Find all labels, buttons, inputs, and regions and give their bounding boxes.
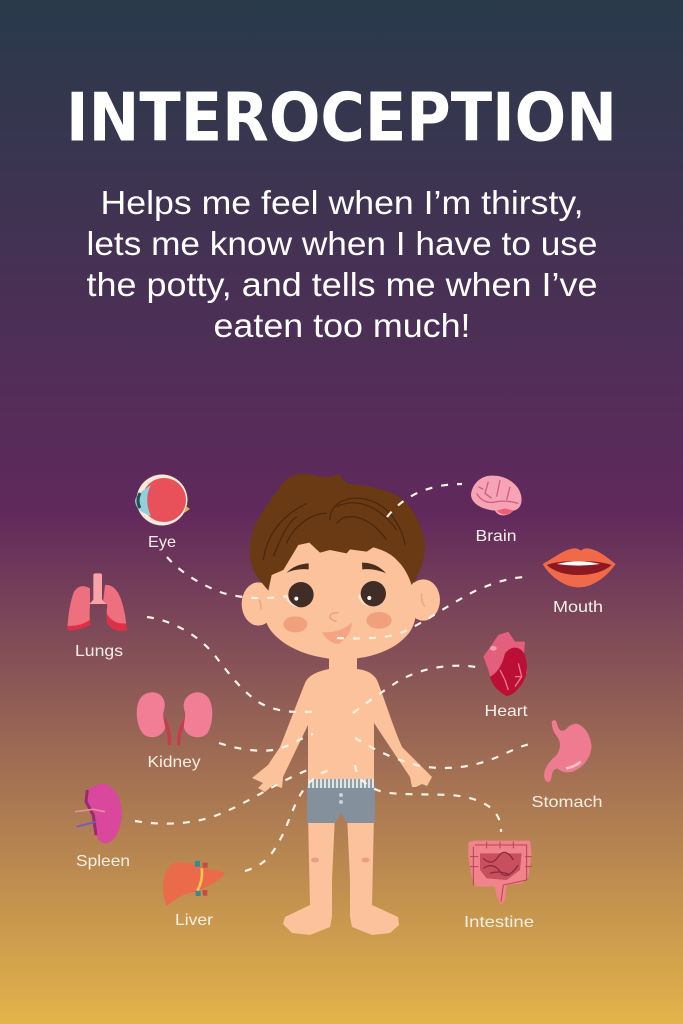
organ: liver [163, 861, 226, 929]
label: eye: Eye [148, 534, 176, 551]
organ: eye [135, 474, 190, 551]
label: intestine: Intestine [464, 914, 534, 931]
nose [330, 613, 338, 621]
organ: intestine [464, 841, 534, 931]
description text block: lets me know when I have to use [86, 225, 598, 262]
organ: stomach [532, 720, 602, 811]
label: kidney: Kidney [148, 754, 200, 771]
cheeks [283, 616, 307, 632]
organ: lungs [67, 573, 127, 660]
connector lines [135, 484, 536, 871]
organ: mouth [543, 548, 616, 616]
connector: spleen [135, 768, 313, 824]
connector: liver [245, 769, 332, 871]
label: spleen: Spleen [76, 853, 130, 870]
connector: lungs [147, 617, 320, 712]
description text block: Helps me feel when I’m thirsty, [100, 184, 584, 221]
eyebrows [287, 563, 309, 573]
head [242, 474, 440, 659]
connector: brain [387, 484, 462, 517]
label: brain: Brain [476, 528, 516, 545]
eyes [288, 582, 314, 607]
description text block [86, 184, 598, 344]
organ: spleen [75, 784, 130, 870]
label: liver: Liver [175, 912, 214, 929]
description text block: the potty, and tells me when I’ve [86, 266, 598, 303]
organ: kidney [137, 692, 212, 771]
label: lungs: Lungs [75, 643, 123, 660]
connector: stomach [355, 738, 536, 768]
organ: heart [483, 632, 528, 720]
connector: kidney [219, 734, 313, 751]
label: mouth: Mouth [553, 599, 603, 616]
connector: eye [167, 557, 287, 598]
organ: brain [471, 476, 522, 545]
label: stomach: Stomach [532, 794, 602, 811]
connector: mouth [337, 577, 527, 638]
hair [250, 474, 425, 591]
connector: heart [353, 666, 476, 713]
knee marks [311, 858, 319, 862]
title: INTEROCEPTION [66, 78, 617, 156]
boy character [242, 474, 440, 935]
ears [242, 582, 275, 626]
face [264, 526, 416, 659]
connector: intestine [355, 765, 501, 832]
body skin [252, 655, 432, 935]
shorts [307, 779, 375, 823]
mouth [322, 623, 352, 644]
label: heart: Heart [484, 703, 528, 720]
description text block: eaten too much! [214, 307, 470, 344]
